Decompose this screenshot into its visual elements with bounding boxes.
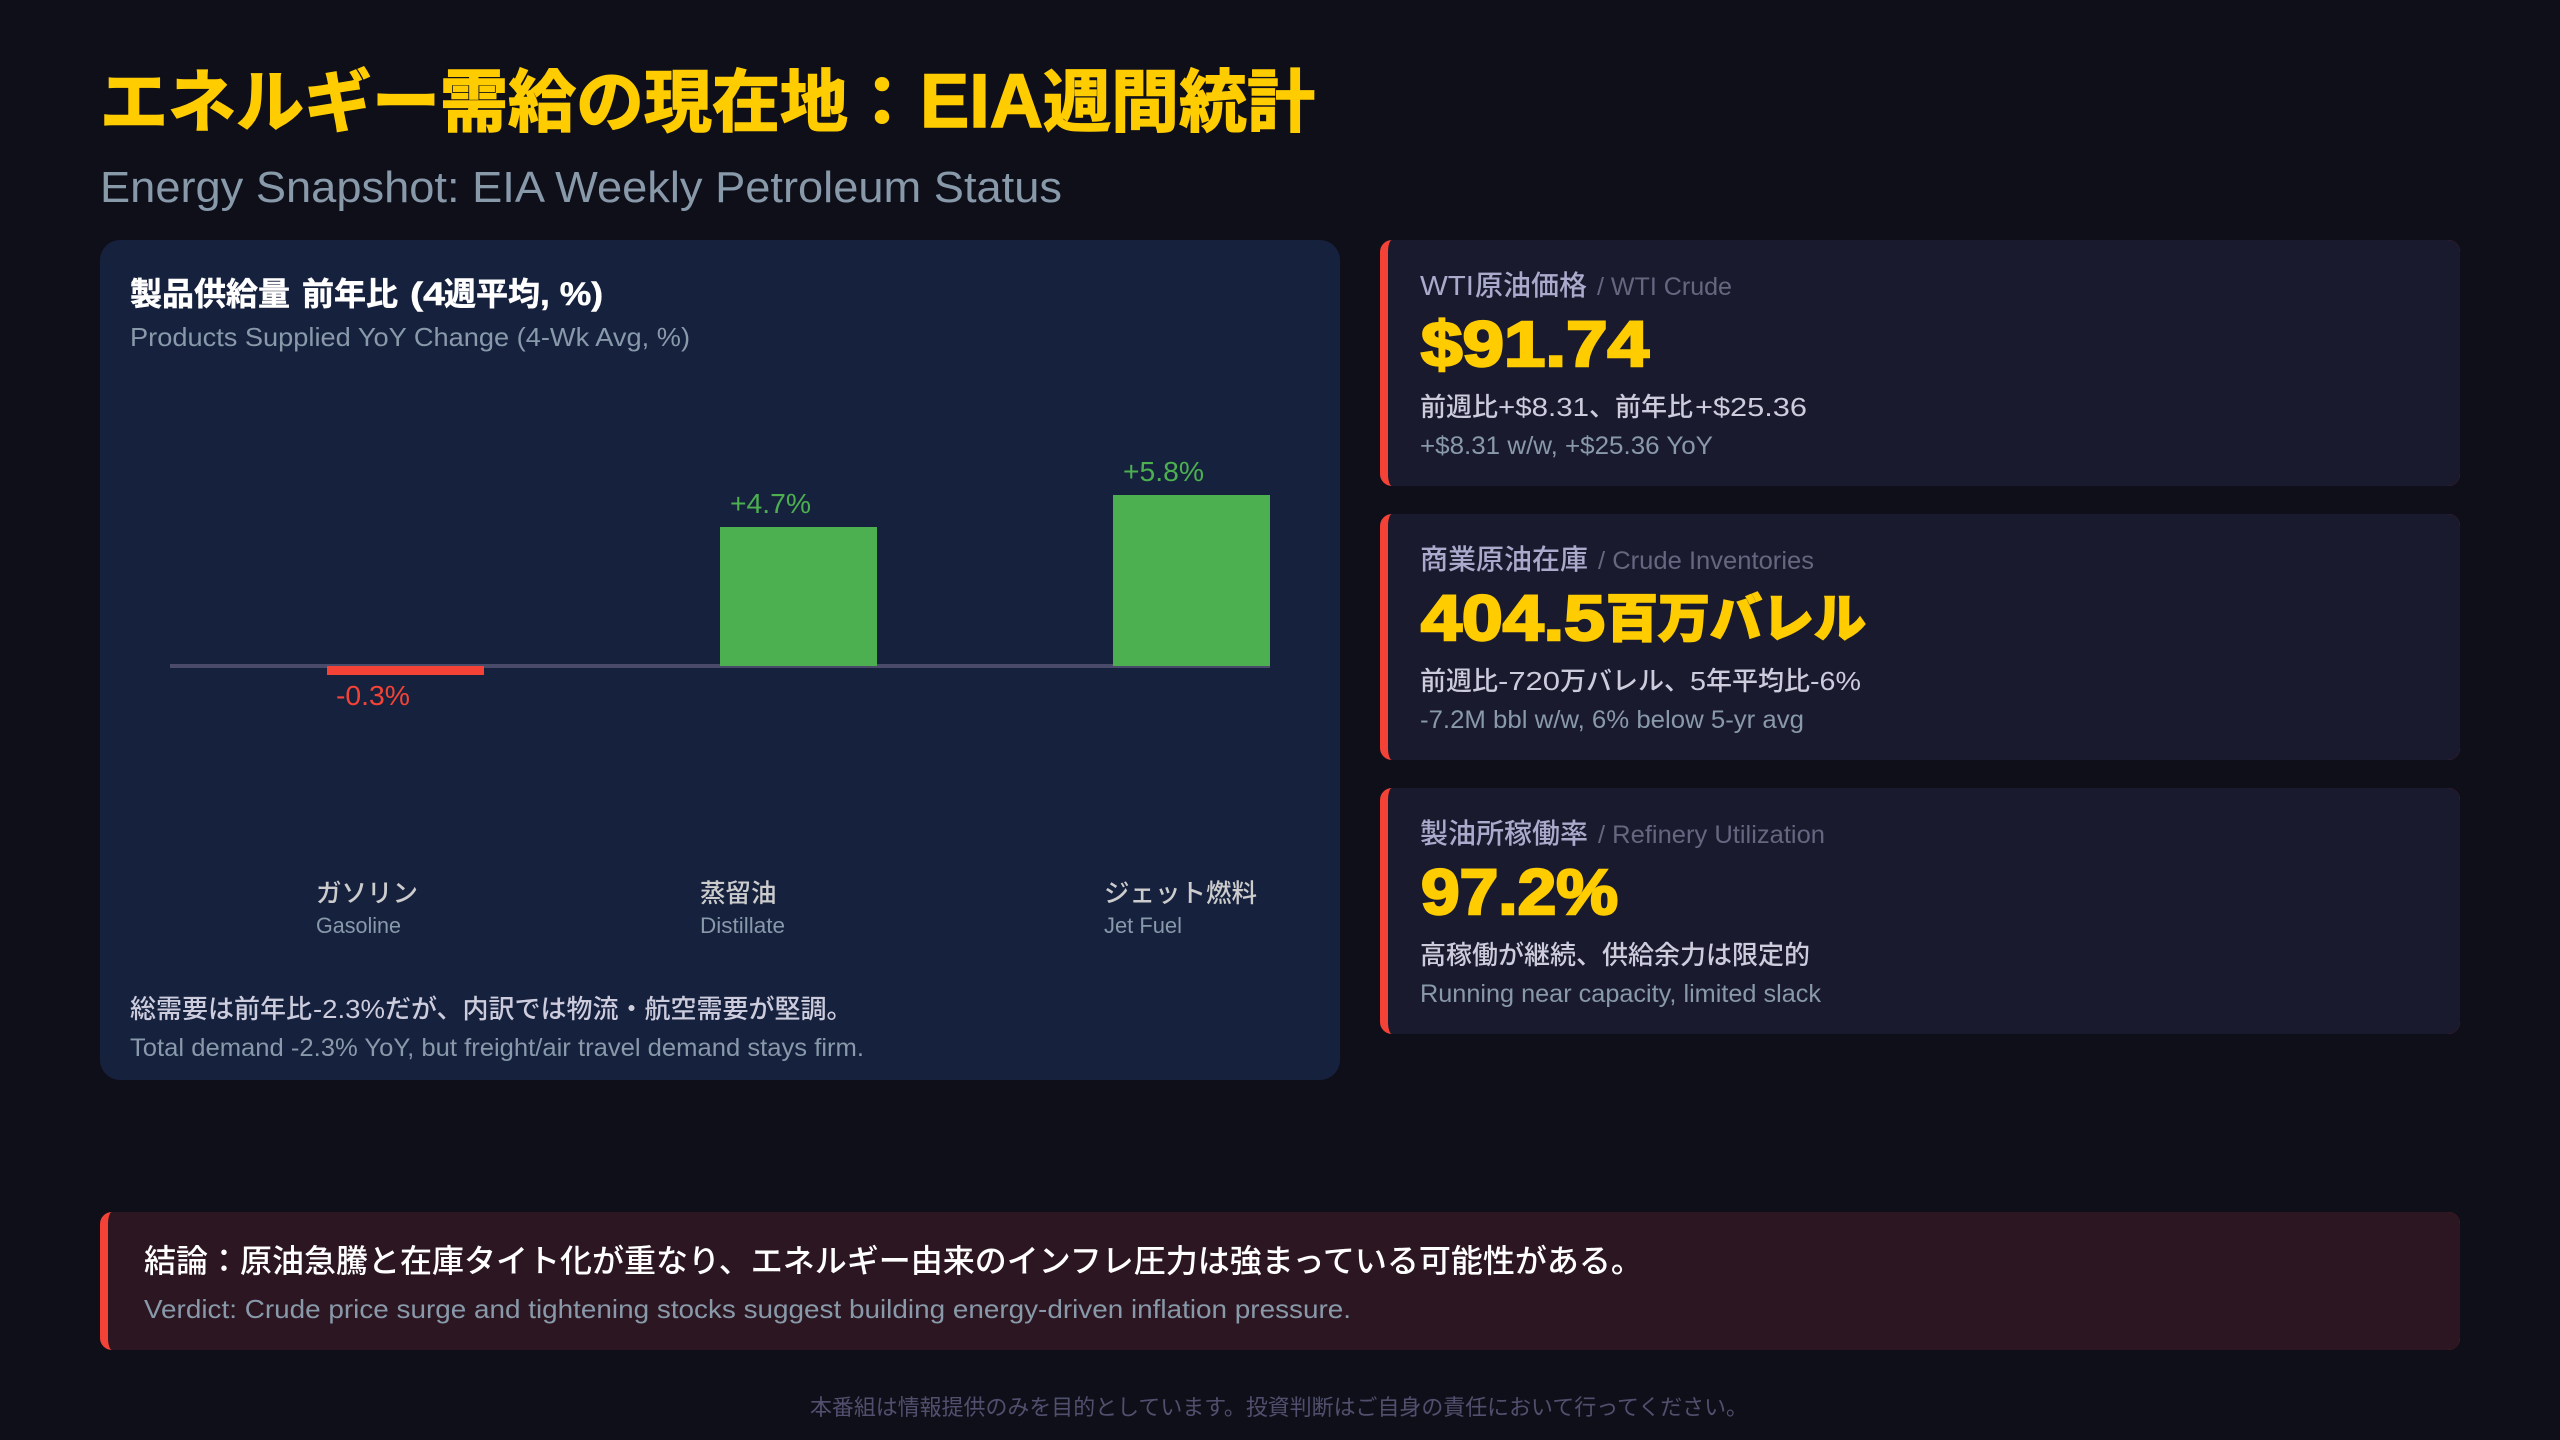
category: gasoline: Gasoline: [316, 913, 401, 938]
title: エネルギー需給の現在地：: [100, 65, 916, 141]
card value: 百万バレル: [1606, 591, 1866, 649]
card label: / WTI Crude: [1597, 273, 1732, 301]
card detail: 前週比: [1420, 666, 1498, 696]
card label: 製油所稼働率: [1420, 818, 1588, 849]
card: WTI crude: [1380, 240, 2460, 486]
chart note: Total demand -2.3% YoY, but freight/air travel demand stays firm.: [130, 1034, 864, 1062]
card detail: [1420, 392, 1807, 460]
card: refinery utilization: [1380, 788, 2460, 1034]
card detail: 年平均比: [1706, 666, 1810, 696]
card label: [1420, 818, 1825, 849]
subtitle: Energy Snapshot: EIA Weekly Petroleum Status: [100, 163, 1062, 212]
category: gasoline: ガソリン: [316, 880, 418, 908]
category: jet fuel: [1104, 880, 1257, 938]
card value: $91.74: [1421, 308, 1649, 380]
card detail: +$8.31: [1498, 392, 1589, 422]
card: crude inventories: [1380, 514, 2460, 760]
card detail: -720: [1498, 666, 1560, 696]
card detail: -7.2M bbl w/w, 6% below 5-yr avg: [1420, 706, 1804, 734]
chart note: だが、内訳では物流・航空需要が堅調。: [385, 994, 852, 1024]
chart note: 総需要は前年比: [130, 994, 312, 1024]
card detail: -6%: [1810, 666, 1861, 696]
card label: 商業原油在庫: [1420, 544, 1588, 575]
card detail: [1420, 666, 1861, 734]
card detail: 万バレル、: [1560, 666, 1690, 696]
chart note: -2.3%: [313, 994, 385, 1024]
category: distillate: Distillate: [700, 913, 785, 938]
bar chart: [170, 456, 1270, 938]
title: 週間統計: [1043, 65, 1315, 141]
bar: jet fuel: [1113, 495, 1270, 666]
value: distillate: +4.7%: [730, 488, 811, 519]
chart note: [130, 994, 864, 1062]
category: gasoline: [316, 880, 418, 938]
card value: [1421, 582, 1866, 654]
value: gasoline: -0.3%: [336, 680, 410, 711]
verdict banner: [100, 1212, 2460, 1350]
panel heading: (4: [410, 276, 445, 312]
card label: / Refinery Utilization: [1598, 821, 1825, 849]
title: [100, 59, 1315, 144]
footer disclaimer: 本番組は情報提供のみを目的としています。投資判断はご自身の責任において行ってください。: [810, 1395, 1748, 1420]
card value: 404.5: [1421, 582, 1605, 654]
value: jet fuel: +5.8%: [1123, 456, 1204, 487]
category: jet fuel: Jet Fuel: [1104, 913, 1182, 938]
panel: products supplied chart: [100, 240, 1340, 1080]
card label: [1420, 270, 1732, 301]
verdict text: 結論：原油急騰と在庫タイト化が重なり、エネルギー由来のインフレ圧力は強まっている可能性がある。: [144, 1243, 1643, 1279]
panel heading: 前年比: [302, 276, 398, 312]
verdict translation: Verdict: Crude price surge and tightening stocks suggest building energy-driven inflation pressure.: [144, 1294, 1351, 1324]
card detail: +$25.36: [1695, 392, 1807, 422]
card value: 97.2%: [1421, 856, 1618, 928]
card detail: 5: [1690, 666, 1706, 696]
panel heading: 週平均: [444, 276, 540, 312]
bar: gasoline: [327, 666, 484, 675]
card label: WTI: [1420, 270, 1474, 301]
panel heading: , %): [540, 276, 603, 312]
title: EIA: [920, 59, 1043, 144]
card detail: 高稼働が継続、供給余力は限定的: [1420, 940, 1810, 970]
panel heading: 製品供給量: [130, 276, 290, 312]
card detail: Running near capacity, limited slack: [1420, 980, 1822, 1008]
panel heading: [130, 276, 603, 312]
category: distillate: [700, 880, 785, 938]
card detail: 前週比: [1420, 392, 1498, 422]
category: jet fuel: ジェット燃料: [1104, 880, 1257, 908]
card label: 原油価格: [1475, 270, 1587, 301]
card label: / Crude Inventories: [1598, 547, 1814, 575]
card detail: [1420, 940, 1822, 1008]
card label: [1420, 544, 1814, 575]
card detail: 、前年比: [1589, 392, 1693, 422]
card detail: +$8.31 w/w, +$25.36 YoY: [1420, 432, 1713, 460]
category: distillate: 蒸留油: [700, 880, 777, 908]
panel subheading: Products Supplied YoY Change (4-Wk Avg, %): [130, 322, 690, 352]
bar: distillate: [720, 527, 877, 666]
